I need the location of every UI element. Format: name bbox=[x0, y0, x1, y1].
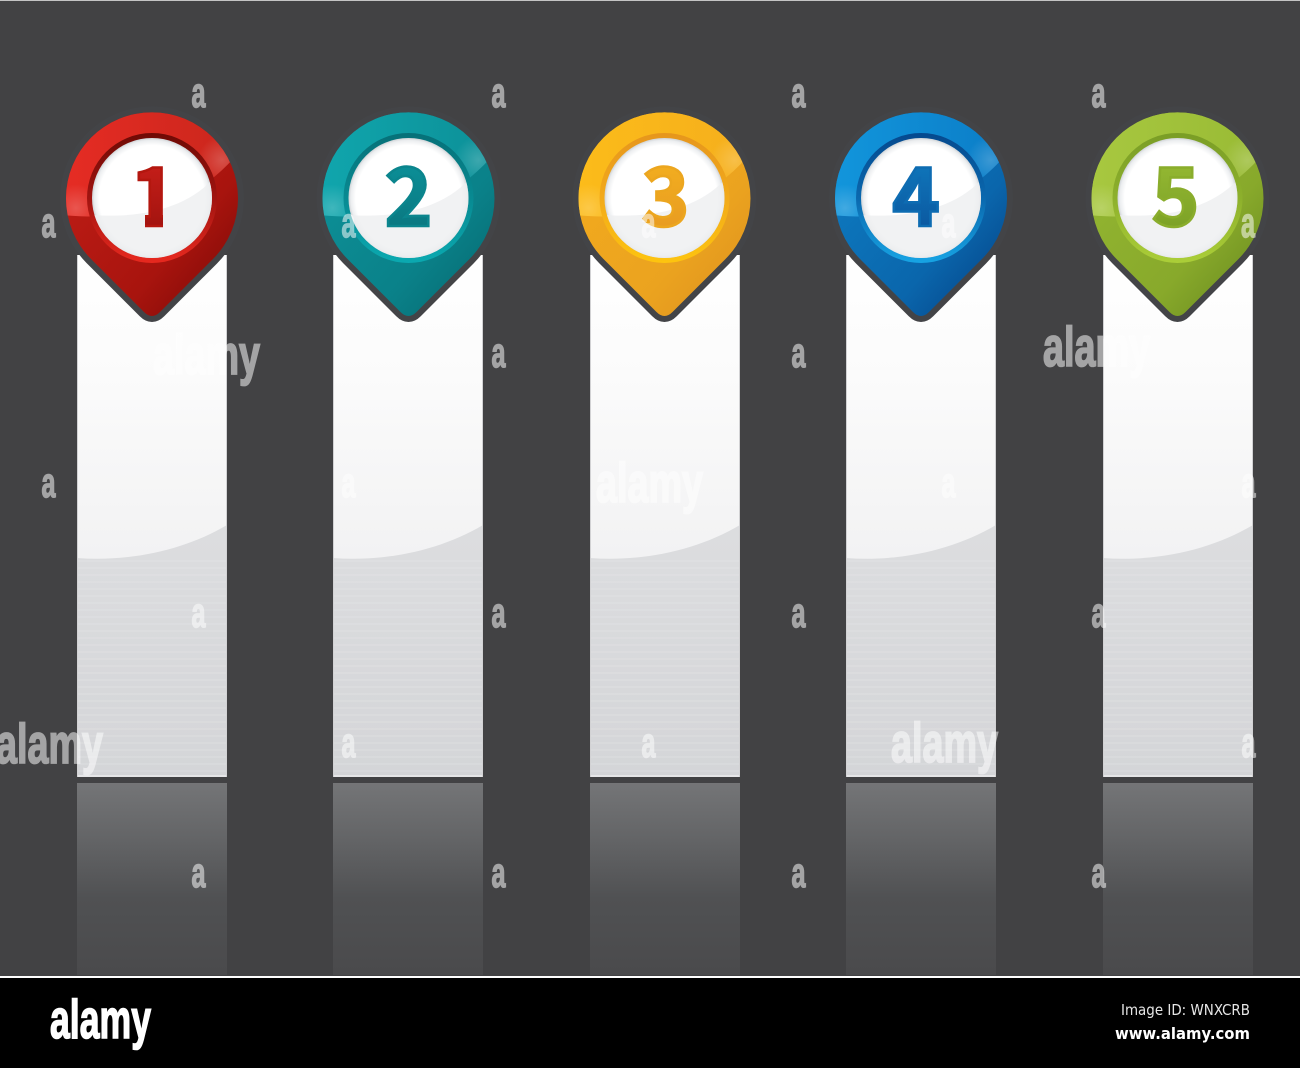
watermarks: a bbox=[942, 199, 956, 246]
column 2 bbox=[322, 112, 494, 974]
banner 5 bbox=[1103, 255, 1253, 777]
pin 3: 3 bbox=[642, 133, 689, 250]
footer bar bbox=[0, 976, 1300, 1068]
watermarks: a bbox=[342, 719, 356, 766]
watermarks: a bbox=[642, 199, 656, 246]
watermarks: a bbox=[342, 459, 356, 506]
watermarks: a bbox=[492, 329, 506, 376]
watermarks: a bbox=[792, 589, 806, 636]
column 3 bbox=[578, 112, 750, 974]
watermarks: a bbox=[42, 199, 56, 246]
watermarks: a bbox=[492, 849, 506, 896]
watermarks: alamy bbox=[891, 711, 998, 774]
reflection 5 bbox=[1103, 783, 1253, 975]
pin 1 bbox=[66, 112, 238, 322]
column 1 bbox=[66, 112, 238, 974]
pin 5: 5 bbox=[1152, 133, 1199, 250]
website: www.alamy.com bbox=[1115, 1024, 1250, 1043]
reflection 4 bbox=[846, 783, 996, 975]
watermarks: a bbox=[1242, 459, 1256, 506]
pin 2 bbox=[322, 112, 494, 322]
watermarks: a bbox=[642, 719, 656, 766]
watermarks: a bbox=[1241, 199, 1255, 246]
column 4 bbox=[835, 112, 1007, 974]
watermarks: a bbox=[42, 459, 56, 506]
pin 3 bbox=[578, 112, 750, 322]
watermarks: a bbox=[1092, 69, 1106, 116]
watermarks: alamy bbox=[153, 323, 260, 386]
watermarks: a bbox=[192, 849, 206, 896]
watermarks: alamy bbox=[596, 451, 703, 514]
banner 1 bbox=[77, 255, 227, 777]
pin 2: 2 bbox=[385, 133, 432, 250]
footer logo: alamy bbox=[50, 988, 151, 1050]
banner 2 bbox=[333, 255, 483, 777]
banner 4 bbox=[846, 255, 996, 777]
watermarks: a bbox=[342, 199, 356, 246]
pin 4 bbox=[835, 112, 1007, 322]
watermarks: a bbox=[492, 69, 506, 116]
column 5 bbox=[1092, 112, 1264, 974]
pin 5 bbox=[1092, 112, 1264, 322]
banner 3 bbox=[590, 255, 740, 777]
reflection 2 bbox=[333, 783, 483, 975]
watermarks: a bbox=[942, 459, 956, 506]
reflection 1 bbox=[77, 783, 227, 975]
watermarks: a bbox=[192, 69, 206, 116]
watermarks: alamy bbox=[0, 712, 103, 775]
watermarks: a bbox=[492, 589, 506, 636]
image id: Image ID: WNXCRB bbox=[1121, 1001, 1250, 1019]
watermarks: a bbox=[792, 69, 806, 116]
watermarks: a bbox=[1092, 589, 1106, 636]
watermarks: a bbox=[792, 849, 806, 896]
watermarks bbox=[0, 69, 1256, 896]
pin 4: 4 bbox=[892, 133, 940, 250]
watermarks: a bbox=[1092, 849, 1106, 896]
watermarks: alamy bbox=[1043, 315, 1150, 378]
reflection 3 bbox=[590, 783, 740, 975]
pin 1: 1 bbox=[130, 133, 178, 250]
watermarks: a bbox=[1242, 719, 1256, 766]
watermarks: a bbox=[192, 589, 206, 636]
watermarks: a bbox=[792, 329, 806, 376]
